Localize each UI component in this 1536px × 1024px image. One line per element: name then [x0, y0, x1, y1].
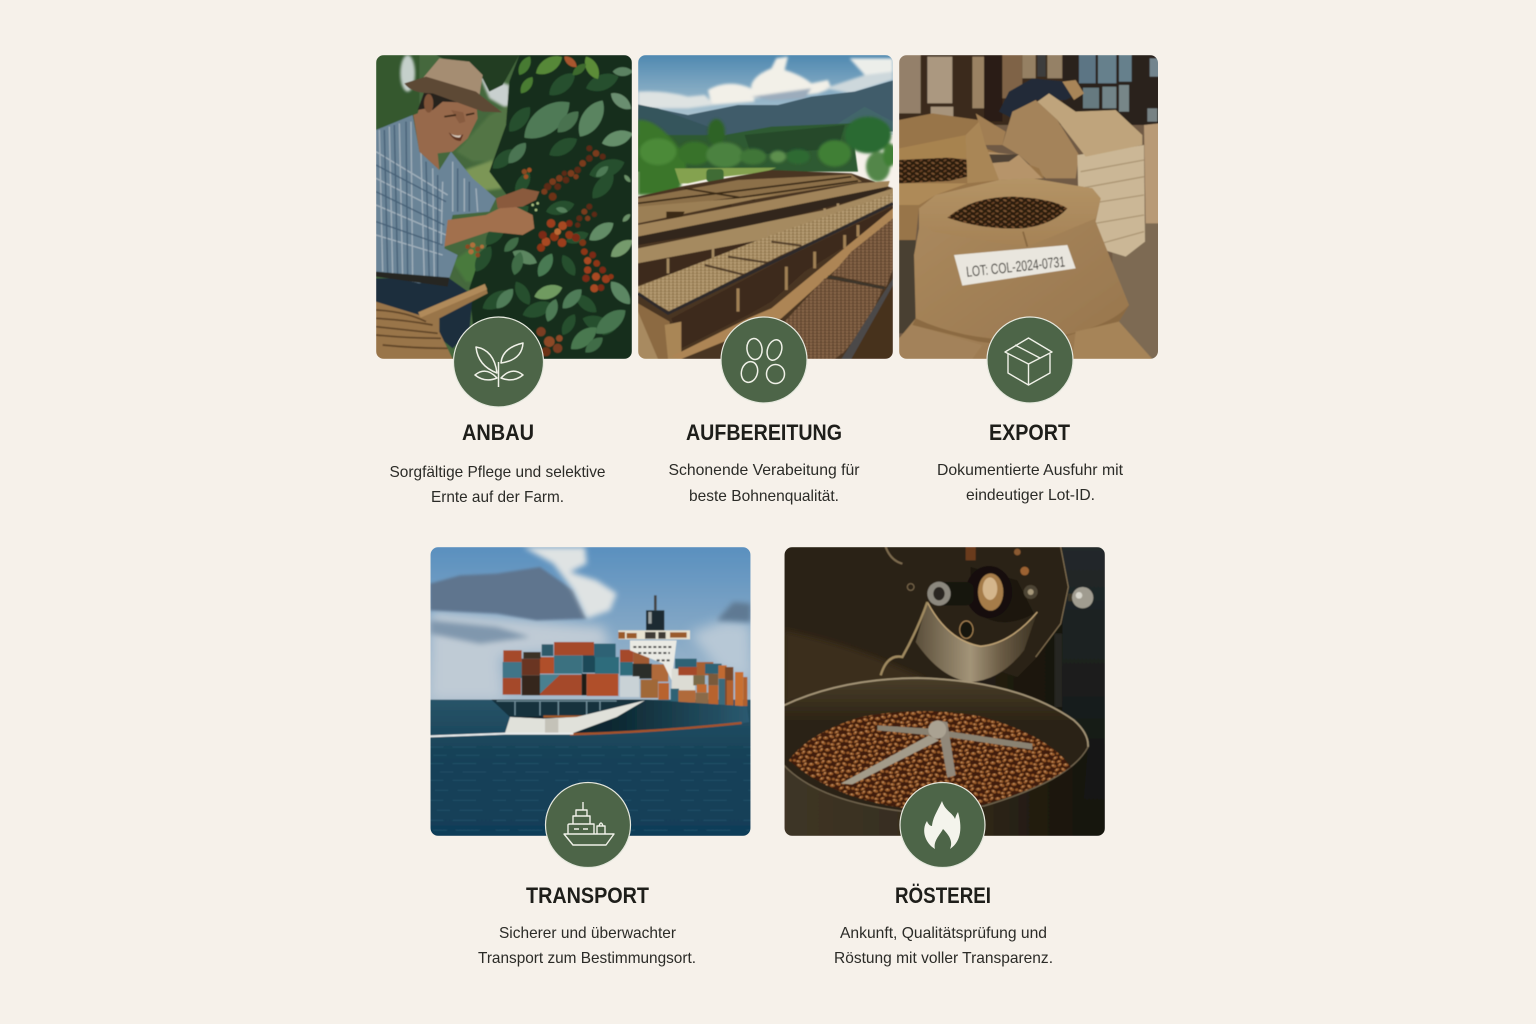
agitator — [877, 725, 1032, 750]
icon: coffee beans — [721, 317, 807, 403]
text: Transport: Sicherer und überwachter — [499, 925, 677, 942]
legs — [638, 303, 671, 359]
right beds — [781, 278, 883, 359]
far beds — [638, 174, 862, 207]
icon: flame — [900, 782, 985, 868]
text: Export — [937, 420, 1124, 504]
front leaves — [578, 100, 605, 138]
dark bundle — [999, 78, 1072, 118]
text: Aufbereitung — [668, 420, 860, 505]
drying beds base — [638, 170, 893, 359]
lot label: LOT: COL-2024-0731 — [966, 255, 1066, 281]
cable — [886, 547, 902, 564]
bed D side — [671, 207, 893, 348]
text: Transport: TRANSPORT — [526, 883, 650, 908]
trees — [638, 122, 858, 172]
mountains — [638, 80, 893, 138]
lot label — [954, 245, 1076, 286]
hull — [492, 700, 749, 734]
rear stacks — [671, 659, 747, 706]
pan outer — [784, 747, 1088, 836]
text: Export: eindeutiger Lot-ID. — [966, 487, 1095, 504]
basket — [376, 287, 488, 359]
text: Transport: Transport zum Bestimmungsort. — [478, 950, 696, 967]
back left sack — [899, 113, 1044, 240]
icon: box — [987, 317, 1073, 403]
silver knob — [1068, 594, 1076, 601]
icon: ship — [546, 782, 630, 868]
beans — [789, 711, 1071, 808]
hat — [423, 58, 483, 97]
panel: Transport photo — [430, 547, 751, 836]
clouds — [638, 57, 893, 108]
text: Export: EXPORT — [989, 420, 1070, 445]
superstructure — [630, 640, 677, 680]
rail — [671, 208, 893, 359]
clouds — [430, 610, 610, 700]
text: Aufbereitung: AUFBEREITUNG — [686, 420, 842, 445]
front sack — [899, 178, 1152, 359]
neck and face — [413, 92, 478, 170]
sea — [430, 700, 751, 836]
floor — [1112, 223, 1159, 359]
pan interior — [784, 678, 1088, 810]
arms — [444, 203, 534, 247]
text: Export: Dokumentierte Ausfuhr mit — [937, 462, 1124, 479]
bed C — [638, 188, 893, 263]
pants — [376, 278, 473, 348]
text: Aufbereitung: Schonende Verabeitung für — [668, 462, 860, 479]
beans in front sack — [947, 197, 1067, 229]
containers — [503, 642, 669, 700]
berries — [465, 145, 614, 356]
text: Anbau: Sorgfältige Pflege und selektive — [390, 464, 606, 481]
bed B — [638, 181, 890, 237]
wall and windows — [899, 55, 1062, 125]
knob — [927, 566, 1012, 618]
shirt — [376, 115, 496, 283]
drum head — [917, 547, 1068, 677]
text: Rösterei: Ankunft, Qualitätsprüfung und — [840, 925, 1047, 942]
text: Anbau: ANBAU — [462, 420, 534, 445]
text: Rösterei: RÖSTEREI — [895, 883, 991, 908]
bed D surface — [638, 193, 893, 312]
panel: Export photo — [899, 55, 1159, 359]
back right sack — [1002, 100, 1079, 178]
icon: plant sprout — [454, 317, 544, 407]
back leaves — [470, 68, 627, 339]
text: Rösterei — [834, 883, 1053, 967]
text: Transport — [478, 883, 696, 967]
text: Rösterei: Röstung mit voller Transparenz. — [834, 950, 1053, 967]
bush mass — [469, 55, 632, 359]
panel: Rösterei photo — [784, 547, 1105, 836]
chute — [916, 602, 1037, 682]
text: Anbau — [390, 420, 606, 506]
far right bag — [1144, 123, 1159, 223]
panel: Anbau photo — [376, 51, 636, 359]
text: Anbau: Ernte auf der Farm. — [431, 489, 564, 506]
text: Aufbereitung: beste Bohnenqualität. — [689, 488, 839, 505]
panel: Aufbereitung photo — [638, 55, 896, 359]
